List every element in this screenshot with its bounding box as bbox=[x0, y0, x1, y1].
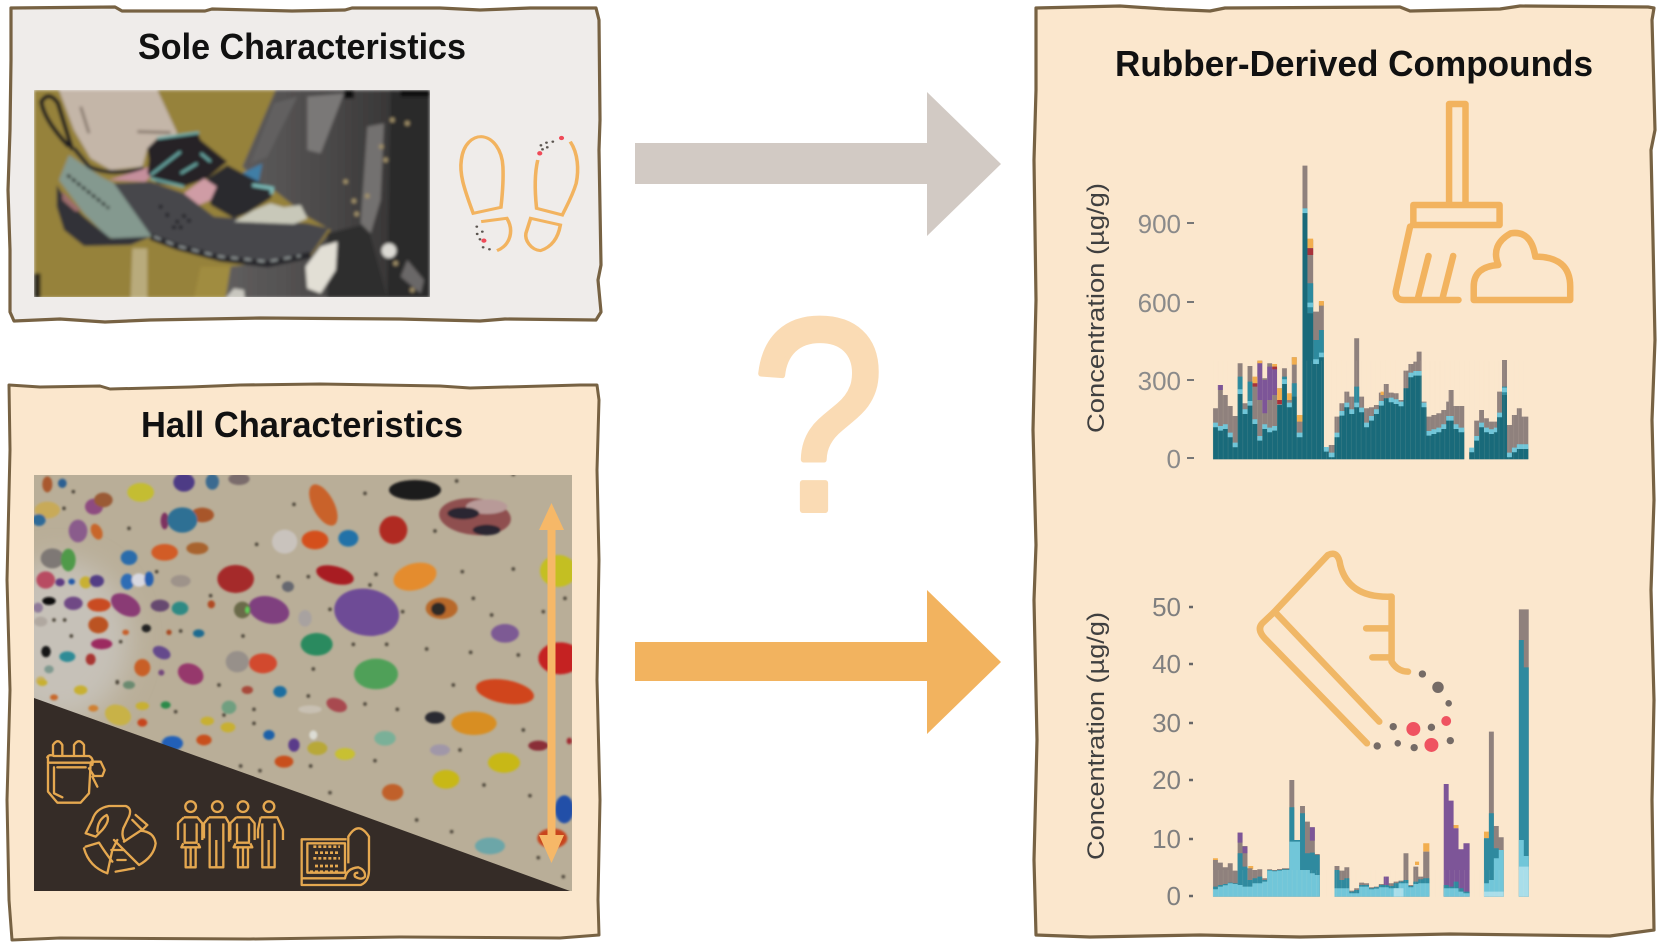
panel: rubber-derived compounds bbox=[1033, 6, 1655, 937]
question mark: ? bbox=[751, 262, 885, 568]
y-axis ticks and labels, sole chart bbox=[1152, 592, 1193, 911]
stacked bars, sole chart bbox=[1213, 609, 1529, 897]
icon: recycling symbol bbox=[84, 806, 156, 873]
y-axis ticks and labels, dust chart bbox=[1138, 209, 1194, 474]
y-axis ticks and labels, sole chart: 30 bbox=[1152, 708, 1181, 738]
arrow: orange arrow to compounds bbox=[635, 590, 1001, 734]
heading: rubber-derived compounds: Rubber-Derived Compounds bbox=[1115, 43, 1593, 84]
panel: hall characteristics bbox=[0, 384, 600, 940]
icon: chalk bag bbox=[47, 741, 105, 803]
photo: climbing wall with holds bbox=[0, 473, 582, 891]
y-axis title, dust chart: Concentration (µg/g) bbox=[1083, 183, 1110, 433]
y-axis ticks and labels, sole chart: 40 bbox=[1152, 649, 1181, 679]
y-axis ticks and labels, dust chart: 0 bbox=[1167, 444, 1181, 474]
icon: four people bbox=[178, 801, 283, 867]
y-axis ticks and labels, sole chart: 0 bbox=[1167, 881, 1181, 911]
y-axis ticks and labels, sole chart: 10 bbox=[1152, 824, 1181, 854]
y-axis ticks and labels, sole chart: 20 bbox=[1152, 765, 1181, 795]
icon: shoe shedding particles bbox=[1260, 554, 1454, 752]
photo: climbing shoe on rock bbox=[34, 90, 430, 298]
panel: sole characteristics bbox=[8, 7, 601, 322]
chart: sole concentration stacked bars bbox=[1083, 592, 1529, 911]
y-axis ticks and labels, sole chart: 50 bbox=[1152, 592, 1181, 622]
y-axis ticks and labels, dust chart: 600 bbox=[1138, 288, 1181, 318]
icon: footprints with rubber particles bbox=[461, 137, 578, 251]
icon: broom and dust bbox=[1396, 104, 1570, 300]
heading: hall characteristics: Hall Characteristics bbox=[141, 404, 463, 445]
arrow: wall height double arrow bbox=[539, 503, 564, 863]
arrow: grey arrow to compounds bbox=[635, 92, 1001, 236]
y-axis title, sole chart: Concentration (µg/g) bbox=[1083, 612, 1110, 860]
chart: dust concentration stacked bars bbox=[1083, 166, 1528, 474]
y-axis ticks and labels, dust chart: 300 bbox=[1138, 366, 1181, 396]
heading: sole characteristics: Sole Characteristics bbox=[138, 26, 466, 67]
stacked bars, dust chart bbox=[1213, 166, 1528, 459]
icon: hall blueprint map bbox=[302, 828, 369, 885]
y-axis ticks and labels, dust chart: 900 bbox=[1138, 209, 1181, 239]
